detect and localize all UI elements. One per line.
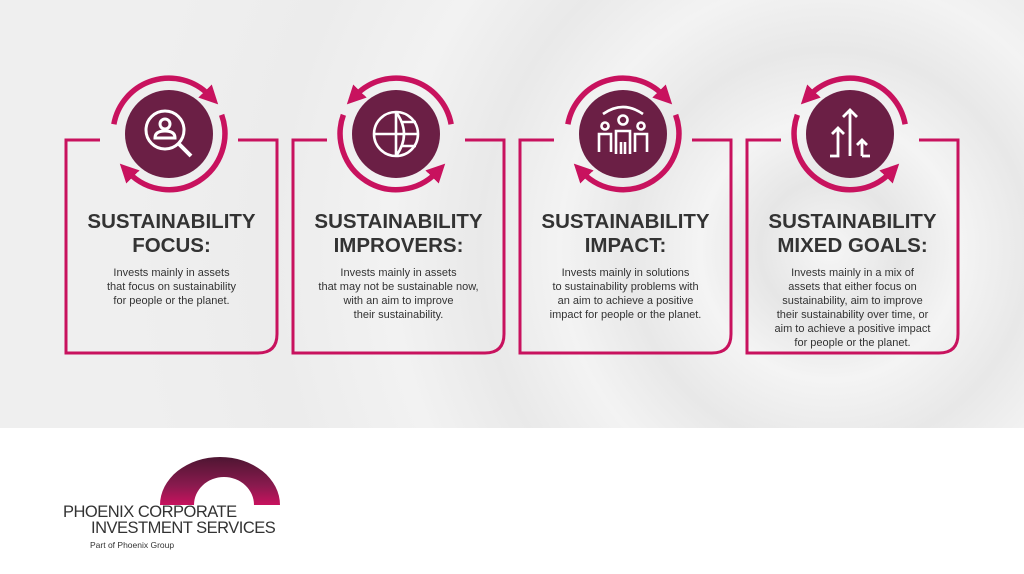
card text 3: an aim to achieve a positive — [558, 295, 693, 307]
icon: search person — [114, 78, 225, 190]
background — [0, 0, 1024, 428]
icon: arrows up — [794, 78, 905, 190]
card text 4 — [768, 210, 937, 349]
card text 4: sustainability, aim to improve — [782, 295, 923, 307]
logo text: PHOENIX CORPORATE — [63, 503, 237, 521]
card text 2: that may not be sustainable now, — [318, 281, 479, 293]
card text 2 — [314, 210, 483, 321]
logo tagline: Part of Phoenix Group — [90, 540, 174, 550]
icon: globe — [340, 78, 451, 190]
card text 4: for people or the planet. — [794, 337, 911, 349]
card frame 2 — [293, 140, 504, 353]
logo arc — [160, 457, 280, 505]
card text 1 — [87, 210, 256, 307]
card text 3: to sustainability problems with — [552, 281, 699, 293]
card text 2: SUSTAINABILITY — [314, 210, 483, 233]
card text 2: their sustainability. — [354, 309, 443, 321]
card text 4: their sustainability over time, or — [777, 309, 928, 321]
cards graphics — [64, 75, 960, 354]
card text 1: Invests mainly in assets — [113, 267, 230, 279]
logo: INVESTMENT SERVICES — [91, 519, 275, 537]
card text 4: SUSTAINABILITY — [768, 210, 937, 233]
card text 4: MIXED GOALS: — [777, 234, 928, 257]
card text 3: IMPACT: — [585, 234, 666, 257]
card text 1: for people or the planet. — [113, 295, 230, 307]
card text 1: SUSTAINABILITY — [87, 210, 256, 233]
card frame 1 — [66, 140, 277, 353]
card text 4: Invests mainly in a mix of — [791, 267, 914, 279]
card text 1: that focus on sustainability — [107, 281, 236, 293]
card text 3: Invests mainly in solutions — [562, 267, 689, 279]
card text 3: impact for people or the planet. — [550, 309, 701, 321]
card text 1: FOCUS: — [132, 234, 211, 257]
card frame 4 — [747, 140, 958, 353]
card text 3 — [541, 210, 710, 321]
icon: people — [568, 78, 679, 190]
logo — [63, 457, 280, 550]
card text 3: SUSTAINABILITY — [541, 210, 710, 233]
card text 2: with an aim to improve — [343, 295, 454, 307]
card text 2: IMPROVERS: — [334, 234, 463, 257]
card frame 3 — [520, 140, 731, 353]
card text 4: aim to achieve a positive impact — [775, 323, 930, 335]
card text 2: Invests mainly in assets — [340, 267, 457, 279]
card text 4: assets that either focus on — [788, 281, 917, 293]
